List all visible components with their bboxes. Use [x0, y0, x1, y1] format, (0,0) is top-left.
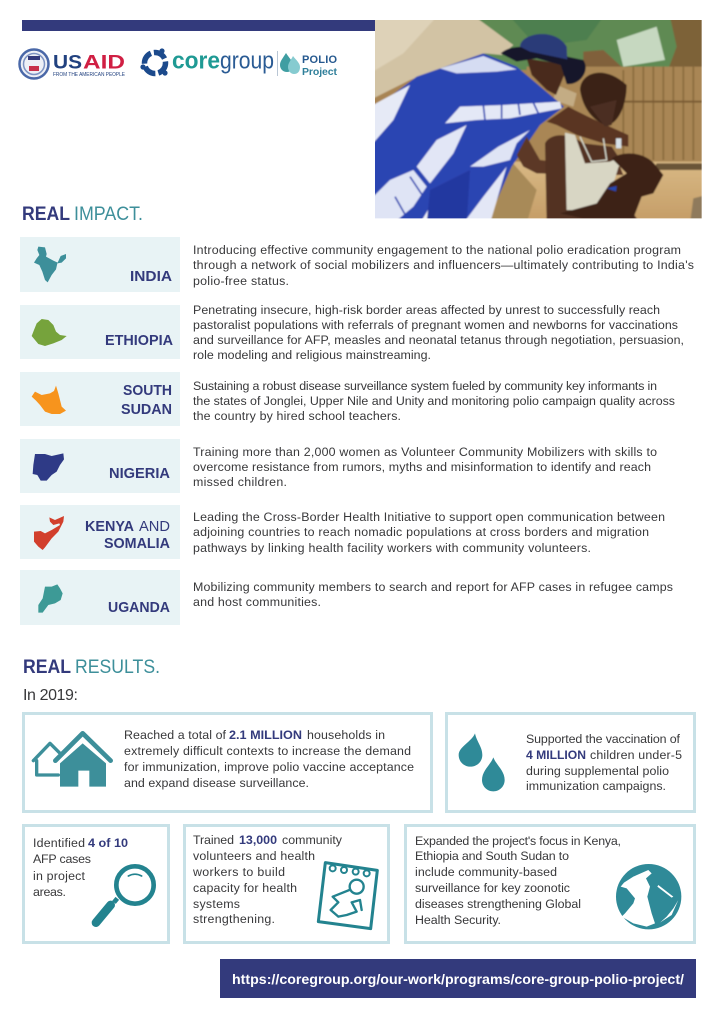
icon: notebook with child: [318, 863, 377, 929]
top bar: [22, 20, 375, 31]
text: South Sudan: [193, 379, 675, 423]
text: households: [124, 728, 414, 790]
text: Kenya and Somalia: Leading the Cross-Border Health Initiative to support open communication between: [193, 510, 665, 524]
link bar: [220, 959, 696, 998]
text: Nigeria: [193, 445, 657, 489]
text: vaccination: Supported the vaccination of: [526, 732, 681, 746]
photo: health worker giving polio drops to a child: [370, 17, 707, 223]
text: households: 2.1 MILLION: [229, 728, 302, 742]
text: trained volunteers: strengthening.: [193, 912, 275, 926]
text: households: for immunization, improve polio vaccine acceptance: [124, 760, 414, 774]
label: South Sudan: [121, 382, 172, 418]
text: Kenya and Somalia: [193, 510, 665, 555]
text: trained volunteers: community: [282, 833, 343, 847]
text: South Sudan: the country by hired school teachers.: [193, 409, 401, 423]
text: vaccination: 4 MILLION: [526, 748, 586, 762]
panel: Uganda: [20, 570, 673, 625]
logo: USAID: [20, 50, 126, 78]
label: Kenya and Somalia: [85, 518, 170, 552]
text: AFP cases: 4 of 10: [88, 836, 128, 850]
map: South Sudan: [32, 386, 66, 414]
text: expanded focus: include community-based: [415, 865, 557, 879]
heading: real impact: REAL: [22, 204, 70, 225]
panel: households: [24, 714, 432, 812]
map: India: [34, 247, 66, 282]
text: vaccination: [526, 732, 682, 793]
text: trained volunteers: Trained: [193, 833, 234, 847]
text: expanded focus: surveillance for key zoonotic: [415, 881, 570, 895]
heading: real results: [23, 656, 160, 678]
arms: [547, 107, 628, 147]
label: South Sudan: SOUTH: [123, 382, 172, 399]
label: Kenya and Somalia: SOMALIA: [104, 535, 170, 552]
text: Ethiopia: [193, 303, 684, 362]
logo: USAID: FROM THE AMERICAN PEOPLE: [53, 72, 126, 78]
text: trained volunteers: 13,000: [239, 833, 277, 847]
text: households: and expand disease surveillance.: [124, 776, 309, 790]
text: trained volunteers: capacity for health: [193, 881, 297, 895]
text: Uganda: [193, 580, 673, 609]
text: expanded focus: Health Security.: [415, 913, 501, 927]
text: expanded focus: diseases strengthening Global: [415, 897, 581, 911]
label: Ethiopia: ETHIOPIA: [105, 332, 173, 349]
text: India: through a network of social mobilizers and influencers—ultimately contributing to India's: [193, 258, 694, 272]
heading: real impact: [22, 204, 143, 225]
panel: AFP cases: [24, 826, 168, 942]
text: AFP cases: Identified: [33, 836, 85, 850]
text: India: polio-free status.: [193, 274, 289, 288]
logo: polio project: POLIO: [302, 54, 337, 66]
text: Ethiopia: pastoralist populations with referrals of pregnant women and newborns for vaccinations: [193, 318, 678, 332]
text: Ethiopia: and surveillance for AFP, measles and neonatal tetanus through negotiation, persuasion,: [193, 333, 684, 347]
text: vaccination: during supplemental polio: [526, 764, 669, 778]
text: Nigeria: missed children.: [193, 475, 287, 489]
label: Nigeria: NIGERIA: [109, 465, 170, 482]
text: Nigeria: overcome resistance from rumors, myths and misinformation to identify and reach: [193, 460, 651, 474]
label: India: INDIA: [130, 268, 172, 285]
text: South Sudan: Sustaining a robust disease surveillance system fueled by community key informants in: [193, 379, 657, 393]
text: AFP cases: AFP cases: [33, 852, 91, 866]
text: households: extremely difficult contexts to increase the demand: [124, 744, 411, 758]
text: Nigeria: Training more than 2,000 women as Volunteer Community Mobilizers with skills to: [193, 445, 657, 459]
text: trained volunteers: [192, 833, 343, 926]
text: expanded focus: Ethiopia and South Sudan to: [415, 849, 569, 863]
text: households: Reached a total of: [124, 728, 227, 742]
text: households: households in: [307, 728, 385, 742]
panel: trained volunteers: [184, 826, 388, 942]
heading: real impact: IMPACT.: [74, 204, 143, 225]
text: India: [193, 243, 694, 288]
label: Kenya and Somalia: AND: [139, 518, 170, 535]
panel: Kenya and Somalia: [20, 505, 665, 559]
text: South Sudan: the states of Jonglei, Upper Nile and Unity and monitoring polio campaign quality across: [193, 394, 675, 408]
link bar: https://coregroup.org/our-work/programs/core-group-polio-project/: [232, 971, 684, 987]
logo: polio project: [280, 53, 338, 78]
panel: expanded focus: [406, 826, 694, 942]
text: AFP cases: [33, 836, 128, 899]
text: vaccination: immunization campaigns.: [526, 779, 666, 793]
garment: [370, 53, 564, 223]
panel: Nigeria: [20, 439, 657, 493]
map: Ethiopia: [32, 319, 67, 346]
text: Kenya and Somalia: adjoining countries to reach nomadic populations at cross borders and migration: [193, 525, 649, 539]
panel: India: [20, 237, 694, 292]
icon: magnifier: [96, 866, 154, 923]
text: expanded focus: [415, 834, 621, 927]
mother: [580, 73, 627, 125]
heading: real results: REAL: [23, 656, 71, 678]
heading: real results: RESULTS.: [75, 656, 160, 678]
icon: drops: [459, 733, 505, 791]
text: Ethiopia: role modeling and religious mainstreaming.: [193, 348, 431, 362]
label: Uganda: UGANDA: [108, 599, 170, 616]
face and hat: [527, 58, 568, 95]
icon: globe: [616, 864, 681, 929]
subheading: in 2019: In 2019:: [23, 687, 78, 704]
map: Uganda: [38, 584, 63, 613]
logo: USAID: US: [53, 52, 82, 74]
panel: South Sudan: [20, 372, 675, 426]
text: expanded focus: Expanded the project's focus in Kenya,: [415, 834, 621, 848]
label: Kenya and Somalia: KENYA: [85, 518, 134, 535]
map: Kenya and Somalia: [34, 516, 64, 550]
text: Kenya and Somalia: pathways by linking health facility workers with community volunteers.: [193, 541, 591, 555]
logo: core group: group: [220, 48, 274, 74]
text: vaccination: children under-5: [590, 748, 682, 762]
map: Nigeria: [33, 453, 64, 481]
panel: Ethiopia: [20, 303, 684, 362]
text: trained volunteers: workers to build: [192, 865, 285, 879]
text: trained volunteers: volunteers and health: [193, 849, 315, 863]
text: trained volunteers: systems: [193, 897, 240, 911]
text: India: Introducing effective community engagement to the national polio eradication program: [193, 243, 681, 257]
logos: [20, 48, 338, 78]
logo: USAID: AID: [83, 52, 125, 74]
panel: vaccination: [446, 714, 694, 812]
logo: core group: [140, 48, 274, 76]
text: AFP cases: areas.: [33, 885, 66, 899]
text: AFP cases: in project: [33, 869, 86, 883]
logo: polio project: Project: [302, 66, 338, 78]
text: Uganda: and host communities.: [193, 595, 321, 609]
icon: houses: [33, 733, 111, 787]
text: Uganda: Mobilizing community members to search and report for AFP cases in refugee camps: [193, 580, 673, 594]
baby: [560, 153, 663, 218]
text: Ethiopia: Penetrating insecure, high-risk border areas affected by unrest to successfully reach: [193, 303, 660, 317]
label: South Sudan: SUDAN: [121, 401, 172, 418]
logo: core group: core: [172, 48, 220, 74]
